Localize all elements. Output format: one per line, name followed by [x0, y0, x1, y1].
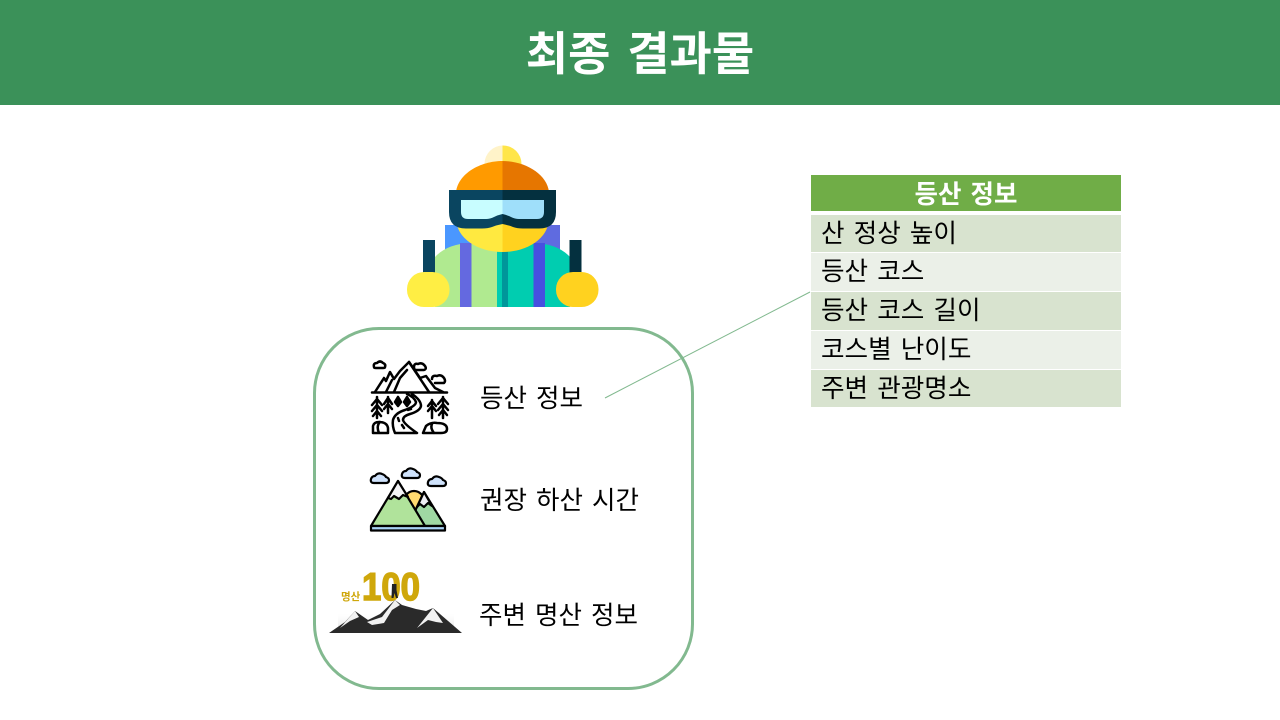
row: 코스별 난이도: 코스별 난이도: [821, 336, 971, 364]
icon: mountain trail: [370, 360, 450, 434]
row: 주변 관광명소: [811, 370, 1121, 407]
text: 100: 100: [362, 566, 420, 609]
row: 등산 코스: 등산 코스: [821, 258, 924, 286]
table header: 등산 정보: [915, 181, 1017, 209]
label: 주변 명산 정보: 주변 명산 정보: [479, 602, 638, 630]
icon: 100 famous mountains logo: [329, 566, 462, 633]
icon: skier with goggles: [407, 146, 598, 307]
table: 등산 정보 details: [811, 175, 1121, 407]
label: 권장 하산 시간: 권장 하산 시간: [480, 487, 639, 515]
icon: mountains with clouds: [370, 467, 448, 532]
panel: result list: [312, 327, 694, 690]
row: 산 정상 높이: [811, 215, 1121, 252]
row: 등산 코스: [811, 253, 1121, 291]
table header: [811, 175, 1121, 211]
row: 주변 관광명소: 주변 관광명소: [821, 375, 971, 403]
label: 등산 정보: 등산 정보: [480, 385, 583, 413]
hiker: [392, 584, 398, 598]
title banner: [0, 0, 1280, 105]
title banner: 최종 결과물: [526, 28, 754, 80]
row: 등산 코스 길이: [811, 292, 1121, 330]
row: 등산 코스 길이: 등산 코스 길이: [821, 297, 980, 325]
row: 산 정상 높이: 산 정상 높이: [821, 220, 957, 248]
text: 명산: 명산: [341, 589, 361, 604]
row: 코스별 난이도: [811, 331, 1121, 369]
connector line: [604, 292, 810, 398]
mountain silhouette: [329, 600, 462, 633]
